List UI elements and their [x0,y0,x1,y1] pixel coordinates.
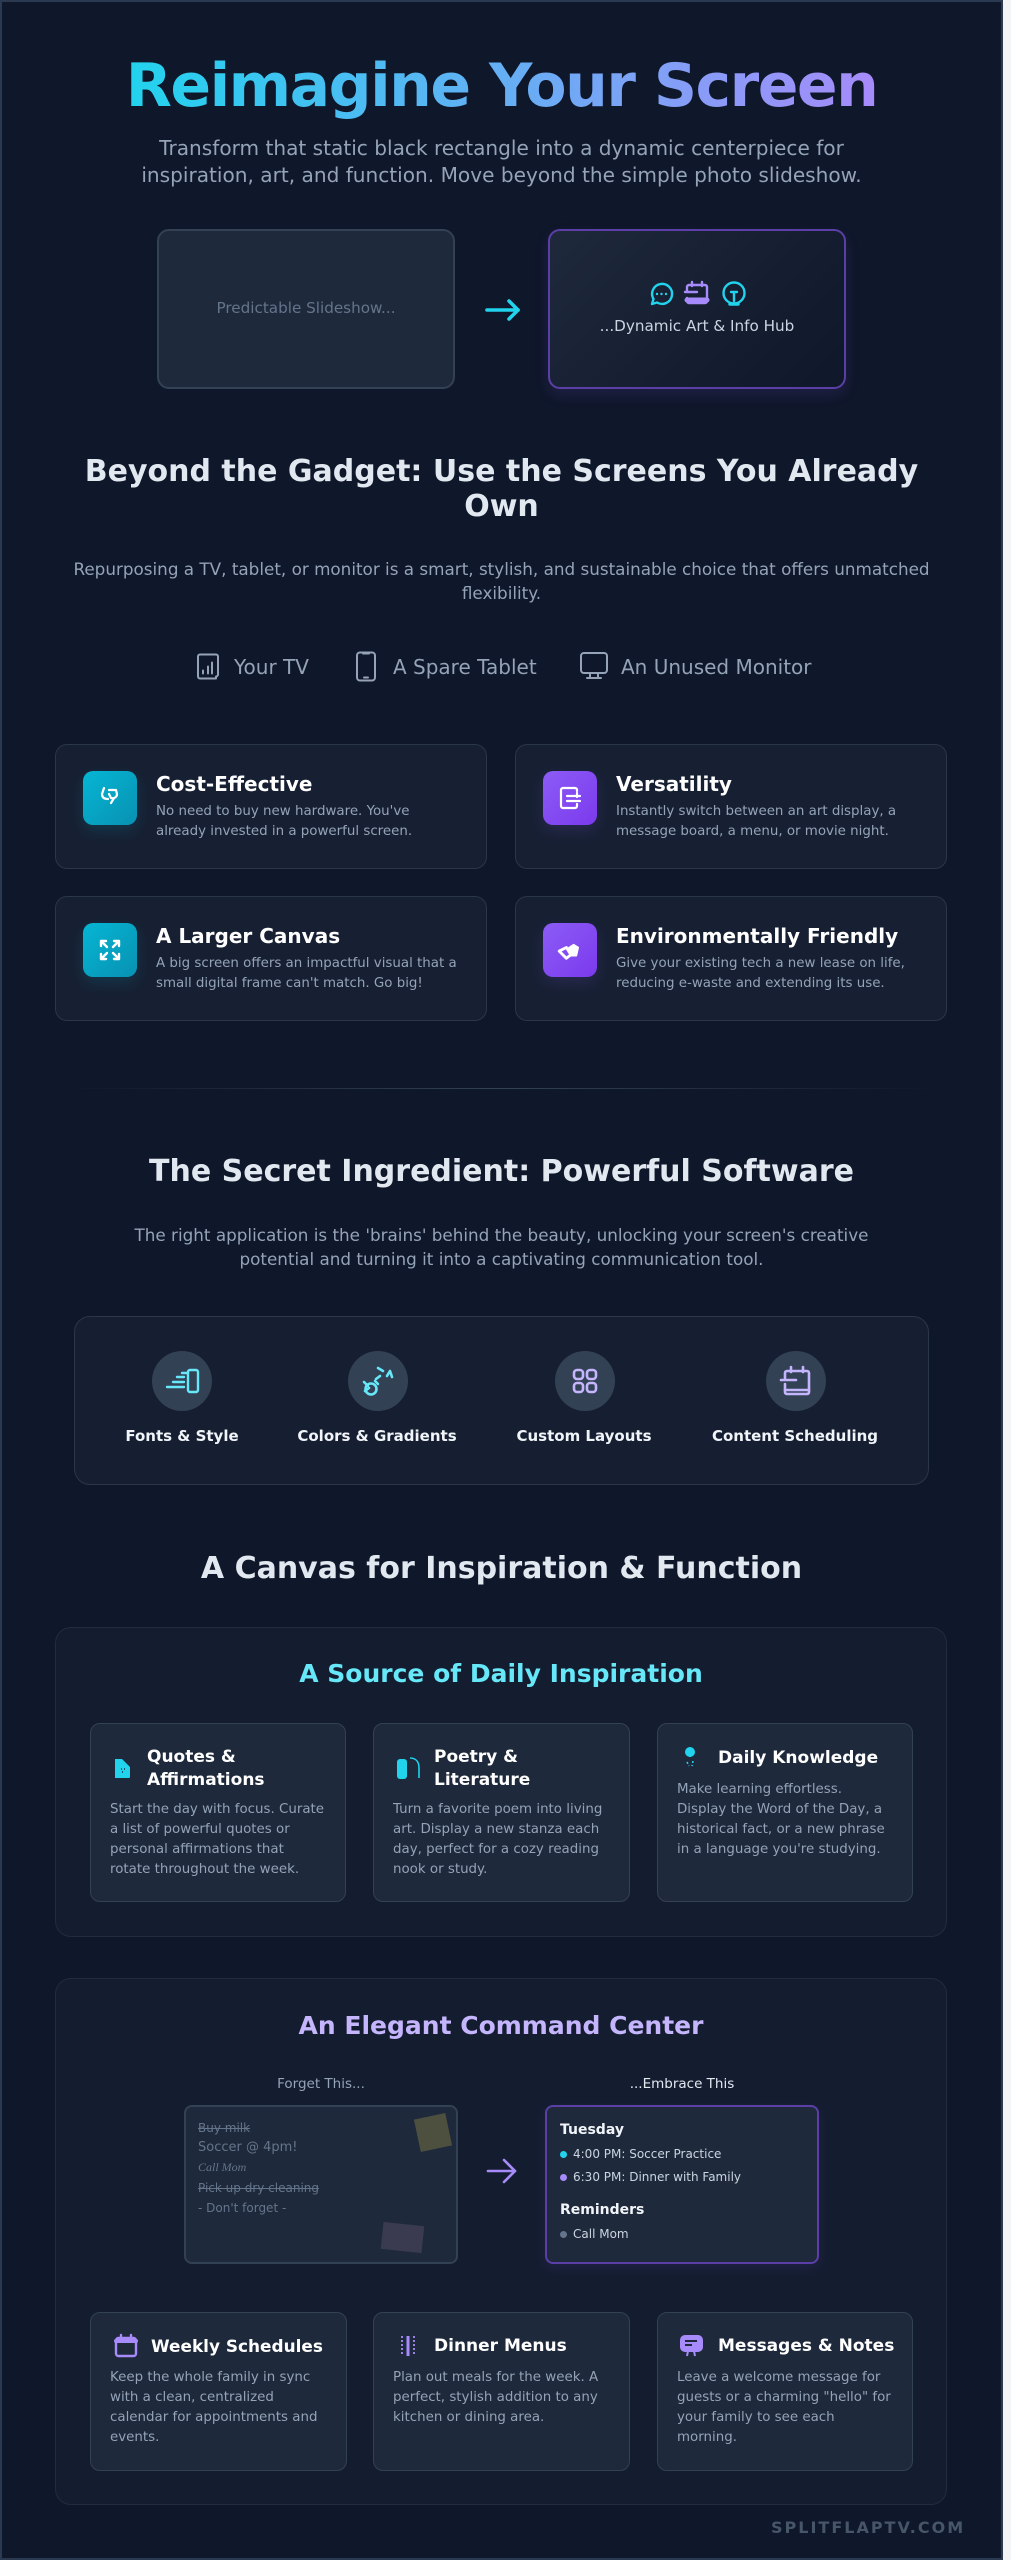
note: dry cleaning: Pick up dry cleaning [198,2181,319,2195]
card description: Display the Word of the Day, a [677,1802,882,1817]
card description: historical fact, or a new phrase [677,1822,885,1837]
card title: Environmentally Friendly [616,924,898,948]
label: dynamic art and info hub: ...Dynamic Art & Info Hub [600,317,794,335]
card description: nook or study. [393,1862,487,1877]
panel heading: A Source of Daily Inspiration [299,1659,703,1688]
icon: expand arrows [83,923,137,977]
card description: A big screen offers an impactful visual that a [156,956,457,971]
label: your tv: Your TV [234,655,309,679]
icon: open book [397,1757,420,1779]
card title: A Larger Canvas [156,924,340,948]
text: software intro: potential and turning it into a captivating communication tool. [239,1249,764,1269]
card: messages and notes [657,2312,913,2471]
card: weekly schedules [90,2312,347,2471]
note: buy milk: Buy milk [198,2121,250,2135]
card description [110,2370,317,2445]
heading: beyond the gadget: Beyond the Gadget: Use the Screens You Already [85,454,918,489]
schedule item: soccer practice: 4:00 PM: Soccer Practice [573,2147,721,2161]
card description: personal affirmations that [110,1842,284,1857]
card description: Leave a welcome message for [677,2370,880,2385]
panel heading: An Elegant Command Center [299,2011,703,2040]
icon: chat bubble [650,282,674,306]
card title: Messages & Notes [718,2336,894,2356]
card description: reducing e-waste and extending its use. [616,976,885,991]
subtitle [141,136,862,187]
card description: No need to buy new hardware. You've [156,804,410,819]
icon circle: fonts and style [152,1351,212,1411]
label: forget this: Forget This... [277,2076,365,2092]
card description: Instantly switch between an art display, a [616,804,896,819]
card description: events. [110,2430,159,2445]
card description: art. Display a new stanza each [393,1822,599,1837]
label: an unused monitor: An Unused Monitor [621,655,812,679]
icon circle: custom layouts [555,1351,615,1411]
card: larger canvas [55,896,487,1021]
heading: secret ingredient: The Secret Ingredient: Powerful Software [149,1154,854,1189]
text: repurposing intro: flexibility. [462,583,541,603]
icon: calendar [684,280,710,304]
icon: tv device [197,654,219,680]
card description [616,956,905,991]
subtitle: inspiration, art, and function. Move beyond the simple photo slideshow. [141,163,862,187]
icon: recycle money [83,771,137,825]
schedule heading: tuesday: Tuesday [560,2122,624,2138]
text: software intro [134,1225,868,1269]
icon circle: colors and gradients [348,1351,408,1411]
card title: Daily Knowledge [718,1748,878,1768]
card description: morning. [677,2430,737,2445]
note: don't forget: - Don't forget - [198,2201,286,2215]
card description: Plan out meals for the week. A [393,2370,598,2385]
schedule item: call mom: Call Mom [573,2227,629,2241]
card description [392,1802,602,1877]
note: call mom: Call Mom [198,2160,246,2174]
board: clean schedule [545,2105,819,2264]
label: predictable slideshow: Predictable Slideshow... [216,299,396,317]
arrow: forget to embrace [486,2158,516,2184]
card description: Start the day with focus. Curate [110,1802,324,1817]
icon: versatile panels [543,771,597,825]
card description: day, perfect for a cozy reading [393,1842,599,1857]
title: Reimagine Your Screen [126,51,877,121]
card title: Affirmations [147,1770,265,1790]
schedule item: dinner: 6:30 PM: Dinner with Family [573,2170,741,2184]
icon: calendar [114,2334,138,2358]
card description: Keep the whole family in sync [110,2370,310,2385]
note: soccer: Soccer @ 4pm! [198,2140,298,2155]
card description [110,1802,324,1877]
icon: eco hands [543,923,597,977]
sticky note: yellow [414,2113,452,2152]
card title [147,1747,265,1790]
text: repurposing intro [73,559,930,603]
label: custom layouts: Custom Layouts [516,1427,652,1445]
card: environmentally friendly [515,896,947,1021]
card description: kitchen or dining area. [393,2410,544,2425]
card description: calendar for appointments and [110,2410,317,2425]
board: messy sticky notes [184,2105,458,2264]
label: fonts and style: Fonts & Style [125,1427,239,1445]
card title: Quotes & [147,1747,236,1767]
icon: light bulb [722,281,746,306]
card: dinner menus [373,2312,630,2471]
card title: Poetry & [434,1747,518,1767]
footer brand: SPLITFLAPTV.COM [771,2518,965,2537]
card description: Make learning effortless. [677,1782,842,1797]
heading: beyond the gadget [85,454,918,524]
card title: Versatility [616,772,732,796]
card description: with a clean, centralized [110,2390,274,2405]
card description [677,2370,891,2445]
card description: small digital frame can't match. Go big! [156,976,423,991]
icon: message bubble [680,2335,703,2356]
card title: Cost-Effective [156,772,312,796]
card description: perfect, stylish addition to any [393,2390,598,2405]
card description [677,1782,885,1857]
heading: beyond the gadget: Own [464,489,539,524]
arrow: transformation [485,299,520,321]
label: embrace this: ...Embrace This [630,2076,734,2092]
icon: knowledge bulb [685,1747,695,1766]
text: software intro: The right application is the 'brains' behind the beauty, unlocking your screen's creative [135,1225,868,1245]
card description [156,956,457,991]
card description: already invested in a powerful screen. [156,824,412,839]
icon: quote document [115,1759,130,1778]
label: content scheduling: Content Scheduling [712,1427,878,1445]
card title [434,1747,530,1790]
card description [156,804,412,839]
card description: Turn a favorite poem into living [393,1802,602,1817]
panel: predictable slideshow screen [157,229,455,389]
card: cost-effective [55,744,487,869]
label: a spare tablet: A Spare Tablet [393,655,537,679]
panel: elegant command center [55,1978,947,2505]
card description: your family to see each [677,2410,835,2425]
panel: software features [74,1316,929,1485]
card title: Weekly Schedules [151,2336,323,2356]
subtitle: Transform that static black rectangle into a dynamic centerpiece for [159,136,844,160]
card: daily knowledge [657,1723,913,1902]
panel: dynamic art hub screen [548,229,846,389]
label: colors and gradients: Colors & Gradients [297,1427,457,1445]
card description: message board, a menu, or movie night. [616,824,889,839]
schedule heading: reminders: Reminders [560,2202,644,2218]
card description: guests or a charming "hello" for [677,2390,891,2405]
card: poetry and literature [373,1723,630,1902]
card: versatility [515,744,947,869]
sticky note: purple [381,2222,424,2253]
panel: source of daily inspiration [55,1627,947,1937]
card description [616,804,896,839]
text: repurposing intro: Repurposing a TV, tablet, or monitor is a smart, stylish, and sustainable choice that offers unmatched [73,559,930,579]
card description: rotate throughout the week. [110,1862,299,1877]
card description [393,2370,598,2425]
card title: Dinner Menus [434,2336,567,2356]
icon: tablet device [356,652,376,682]
card: quotes and affirmations [90,1723,346,1902]
card title: Literature [434,1770,530,1790]
icon: utensils [401,2336,415,2356]
icon circle: content scheduling [766,1351,826,1411]
heading: canvas for inspiration and function: A Canvas for Inspiration & Function [201,1551,802,1586]
icon: monitor device [580,652,608,679]
card description: a list of powerful quotes or [110,1822,290,1837]
card description: Give your existing tech a new lease on life, [616,956,905,971]
card description: in a language you're studying. [677,1842,881,1857]
